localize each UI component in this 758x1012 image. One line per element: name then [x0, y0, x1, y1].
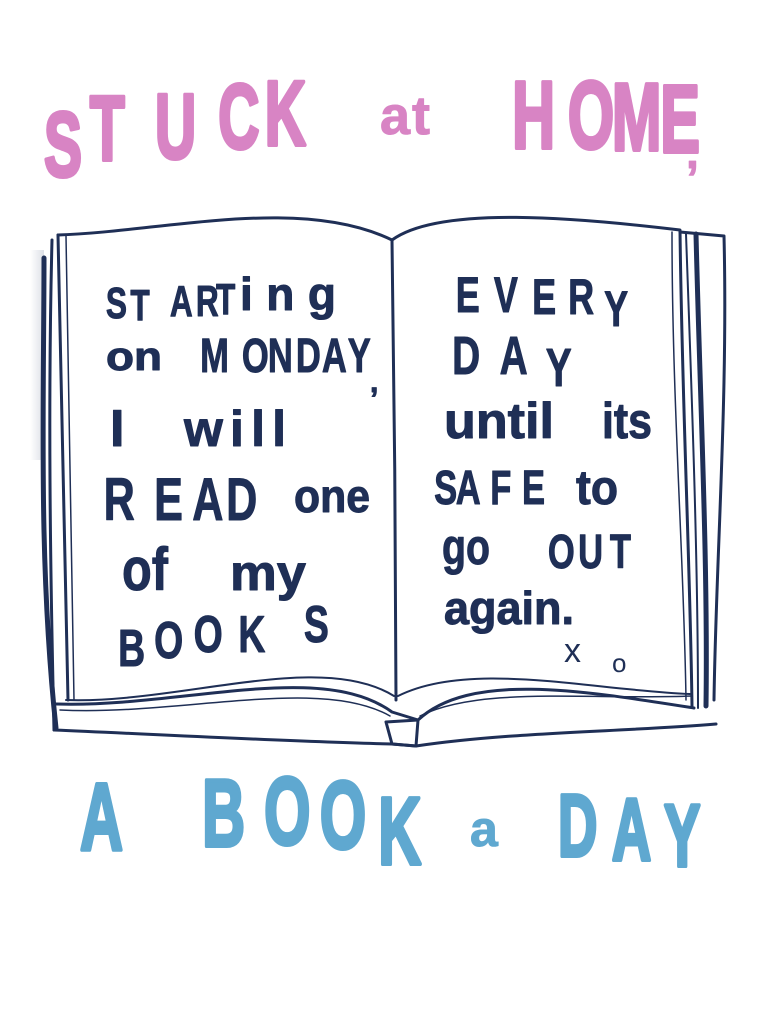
- title: A book a day: BOOK: [202, 757, 421, 884]
- title: A book a day: a: [470, 801, 499, 857]
- illustration: open book: [30, 217, 725, 746]
- left page text: [104, 268, 378, 677]
- title: A book a day: A: [80, 763, 123, 870]
- title: Stuck at home: HOME: [512, 61, 700, 172]
- left page text: MONDAY: [200, 328, 371, 382]
- title: A book a day: [80, 757, 700, 885]
- left page text: READ: [104, 467, 257, 534]
- right page text: EVERY: [456, 268, 628, 337]
- left page text: of: [122, 536, 169, 603]
- right page text: x: [564, 632, 581, 670]
- left page text: BOOKS: [118, 595, 329, 677]
- left page text: ,: [370, 366, 378, 399]
- title: Stuck at home: at: [380, 86, 430, 146]
- left page text: will: [183, 401, 286, 457]
- left page text: my: [230, 545, 306, 601]
- title: Stuck at home: STUCK: [44, 63, 306, 196]
- left page text: one: [294, 470, 370, 522]
- left page text: ing: [240, 268, 336, 320]
- right page text: again.: [444, 582, 574, 634]
- title: Stuck at home: ,: [686, 126, 699, 178]
- right page text: DAY: [452, 325, 572, 397]
- right page text: to: [576, 462, 618, 515]
- left page text: START: [106, 275, 235, 330]
- right page text: go: [442, 519, 490, 575]
- left page text: on: [106, 335, 162, 379]
- title: A book a day: DAY: [558, 777, 700, 885]
- right page text: OUT: [548, 524, 631, 578]
- left edge shading: [30, 250, 44, 460]
- right page text: until: [444, 393, 554, 449]
- title: Stuck at home: [44, 61, 700, 196]
- book cover and page outlines: [43, 217, 725, 746]
- right page text: [434, 268, 652, 678]
- left page text: I: [110, 400, 124, 458]
- right page text: its: [602, 393, 652, 449]
- right page text: o: [612, 648, 626, 678]
- right page text: SAFE: [434, 460, 545, 514]
